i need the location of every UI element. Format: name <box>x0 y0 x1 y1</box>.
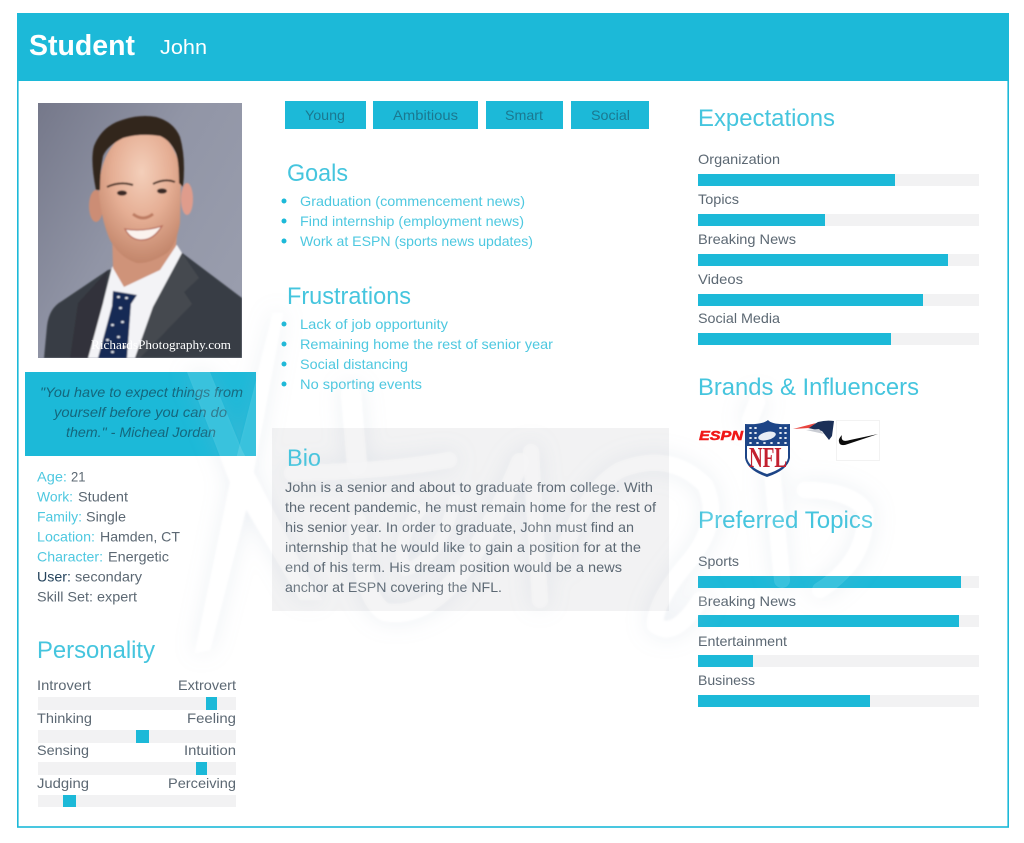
tag: ambitious: Ambitious <box>393 107 458 123</box>
demographic facts: Single <box>86 508 126 524</box>
goals heading: Goals <box>287 160 348 187</box>
frustrations heading: Frustrations <box>287 283 411 310</box>
quote text: them." - Micheal Jordan <box>66 424 216 440</box>
tag: social <box>571 101 649 129</box>
photographer credit: RichardsPhotography.com <box>91 337 231 352</box>
persona type: Student <box>29 30 135 62</box>
bio text: the recent pandemic, he must remain home for the rest of <box>285 499 656 515</box>
mouth <box>125 226 162 240</box>
header bar <box>17 13 1009 81</box>
bar: breaking news <box>698 231 979 266</box>
demographic facts: secondary <box>75 568 142 584</box>
brands and influencers heading: Brands & Influencers <box>698 374 919 401</box>
expectations heading: Expectations <box>698 105 835 132</box>
introvert-extrovert slider: Extrovert <box>178 677 236 693</box>
watermark <box>187 313 865 653</box>
tag: ambitious <box>373 101 478 129</box>
lapel <box>135 253 199 358</box>
goals list: Find internship (employment news) <box>300 213 524 229</box>
bio text <box>285 479 656 595</box>
tag: young <box>285 101 366 129</box>
tag: young: Young <box>305 107 345 123</box>
suit <box>44 252 242 358</box>
bar: business <box>698 672 979 707</box>
bar: organization: Organization <box>698 151 780 167</box>
thinking-feeling slider: Thinking <box>37 710 92 726</box>
right brow <box>153 180 175 184</box>
bio text: his senior year. In order to graduate, John must find an <box>285 519 634 535</box>
preferred topics section <box>698 507 979 707</box>
trait tags <box>285 101 649 129</box>
portrait photo <box>38 103 242 358</box>
bar: entertainment <box>698 633 979 667</box>
judging-perceiving slider: Perceiving <box>168 775 236 791</box>
right ear <box>181 183 193 215</box>
shirt <box>88 245 182 358</box>
bar: breaking news <box>698 593 979 627</box>
bar: business: Business <box>698 672 755 688</box>
demographic facts: Age: <box>37 468 67 484</box>
frustrations list: Remaining home the rest of senior year <box>300 336 553 352</box>
frustrations list: No sporting events <box>300 376 422 392</box>
bar: sports: Sports <box>698 553 739 569</box>
goals list: Work at ESPN (sports news updates) <box>300 233 533 249</box>
frustrations list <box>282 316 553 392</box>
introvert-extrovert slider: Introvert <box>37 677 91 693</box>
bar: sports <box>698 553 979 588</box>
demographic facts <box>37 468 180 604</box>
sensing-intuition slider: Intuition <box>184 742 236 758</box>
frustrations list: Social distancing <box>300 356 408 372</box>
logo: nike <box>836 420 880 460</box>
bio text: end of his term. His dream position would be a news <box>285 559 622 575</box>
tag: smart: Smart <box>505 107 543 123</box>
tag: social: Social <box>591 107 630 123</box>
bio text: anchor at ESPN covering the NFL. <box>285 579 502 595</box>
eyes <box>117 190 127 196</box>
thinking-feeling slider <box>37 710 236 743</box>
bar: entertainment: Entertainment <box>698 633 787 649</box>
persona name: John <box>160 37 207 59</box>
bar: organization <box>698 151 979 186</box>
logo: nfl: NFL <box>749 443 787 474</box>
demographic facts: Energetic <box>108 548 169 564</box>
demographic facts: Character: <box>37 548 103 564</box>
demographic facts: Work: <box>37 488 73 504</box>
brand logos <box>699 420 880 477</box>
bar: videos: Videos <box>698 271 743 287</box>
left ear <box>89 190 103 222</box>
sensing-intuition slider: Sensing <box>37 742 89 758</box>
left brow <box>107 183 133 187</box>
demographic facts: 21 <box>71 468 86 484</box>
nose shadow <box>133 214 153 218</box>
hair <box>92 116 184 190</box>
bar: breaking news: Breaking News <box>698 231 796 247</box>
demographic facts: Skill Set: expert <box>37 588 137 604</box>
personality section <box>37 637 236 807</box>
bar: social media: Social Media <box>698 310 780 326</box>
frustrations section <box>282 283 553 392</box>
thinking-feeling slider: Feeling <box>187 710 236 726</box>
logo: patriots <box>793 421 834 440</box>
judging-perceiving slider <box>37 775 236 807</box>
quote box <box>25 372 256 456</box>
goals list <box>282 193 533 249</box>
bio text: John is a senior and about to graduate from college. With <box>285 479 653 495</box>
judging-perceiving slider: Judging <box>37 775 89 791</box>
bar: topics: Topics <box>698 191 739 207</box>
introvert-extrovert slider <box>37 677 236 710</box>
bar: social media <box>698 310 979 345</box>
logo: nfl <box>745 420 790 477</box>
neck <box>112 236 178 288</box>
sensing-intuition slider <box>37 742 236 775</box>
quote text: yourself before you can do <box>53 404 227 420</box>
expectations section <box>698 105 979 345</box>
preferred topics heading: Preferred Topics <box>698 507 873 534</box>
personality heading: Personality <box>37 637 155 664</box>
bio panel <box>272 428 669 611</box>
demographic facts: Location: <box>37 528 95 544</box>
bar: videos <box>698 271 979 306</box>
bar: breaking news: Breaking News <box>698 593 796 609</box>
quote text <box>40 384 243 440</box>
demographic facts: User: <box>37 568 71 584</box>
bar: topics <box>698 191 979 226</box>
bio text: internship that he would like to gain a position for at the <box>285 539 641 555</box>
goals list: Graduation (commencement news) <box>300 193 525 209</box>
bio heading: Bio <box>287 445 321 472</box>
logo: espn: ESPN <box>699 428 744 443</box>
face <box>99 133 181 263</box>
tie <box>98 291 137 358</box>
quote text: "You have to expect things from <box>40 384 243 400</box>
demographic facts: Family: <box>37 508 82 524</box>
frustrations list: Lack of job opportunity <box>300 316 448 332</box>
tag: smart <box>486 101 563 129</box>
goals section <box>282 160 533 249</box>
demographic facts: Student <box>78 488 128 504</box>
demographic facts: Hamden, CT <box>100 528 180 544</box>
